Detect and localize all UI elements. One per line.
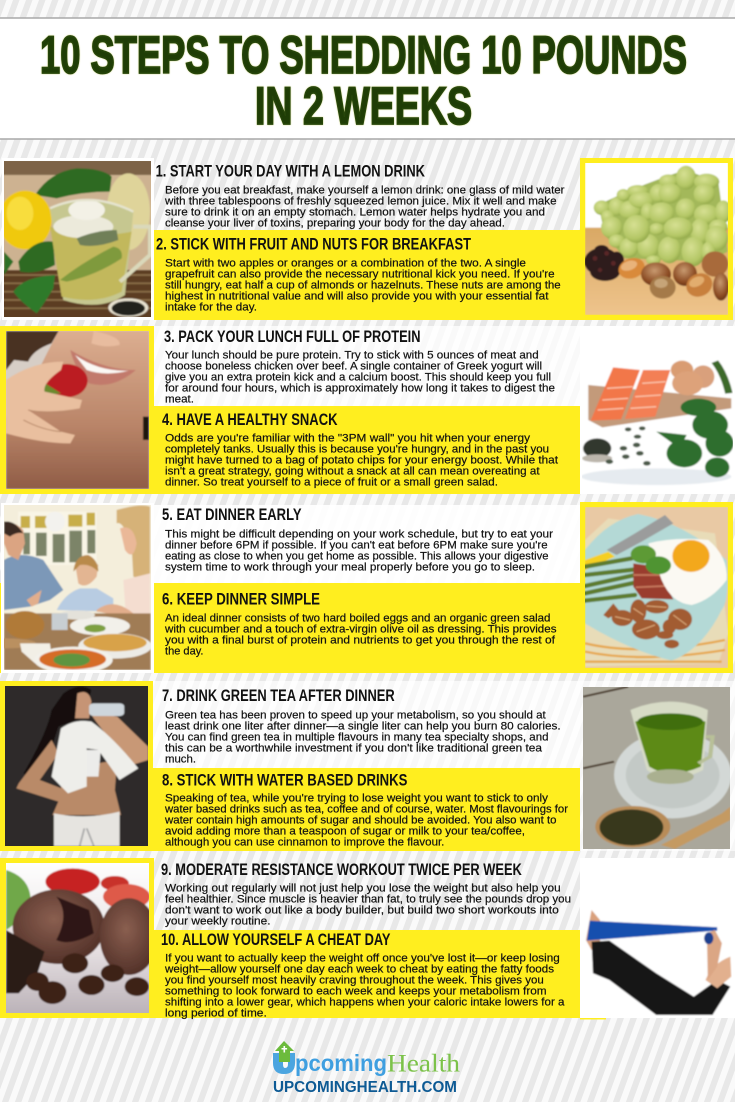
logo: Upcoming Health — [273, 1041, 461, 1096]
heading: step 2: 2. STICK WITH FRUIT AND NUTS FOR BREAKFAST — [156, 234, 471, 254]
title — [40, 26, 687, 136]
text: step 4 — [165, 432, 558, 488]
photo: family dinner — [4, 505, 151, 670]
text: step 9: Working out regularly will not just help you lose the weight but also help you — [165, 882, 561, 894]
text: step 5: system time to work through your meal properly before you go to sleep. — [165, 562, 535, 574]
heading: step 5: 5. EAT DINNER EARLY — [162, 505, 302, 524]
logo: Upcoming Health: Health — [387, 1050, 461, 1078]
text: step 9: don't want to work out like a body builder, but build two short workouts into — [165, 904, 559, 916]
text: step 8 — [164, 792, 568, 848]
text: step 1: Before you eat breakfast, make yourself a lemon drink: one glass of mild water — [165, 184, 565, 196]
text: step 5 — [165, 528, 553, 574]
text: step 3: choose boneless chicken over beef. A single container of Greek yogurt will — [165, 360, 542, 372]
heading: step 1: 1. START YOUR DAY WITH A LEMON DRINK — [156, 162, 426, 180]
photo: woman drinking water — [5, 686, 148, 846]
text: step 6: with cucumber and a touch of extra-virgin olive oil as dressing. This provides — [164, 624, 557, 636]
text: step 4: isn't a great strategy, going without a snack at all can mean overeating at — [165, 466, 540, 478]
text: step 5: This might be difficult depending on your work schedule, but try to eat your — [165, 528, 553, 540]
photo: grapes and nuts — [584, 162, 731, 315]
text: step 4: Odds are you're familiar with the "3PM wall" you hit when your energy — [165, 432, 531, 444]
text: step 2: grapefruit can also provide the necessary nutritional kick you need. If you're — [165, 268, 555, 280]
logo: Upcoming Health: UPCOMINGHEALTH.COM — [273, 1079, 457, 1096]
heading: step 9: 9. MODERATE RESISTANCE WORKOUT TWICE PER WEEK — [161, 860, 522, 879]
text: step 7 — [165, 710, 561, 766]
text: step 9: your weekly routine. — [165, 916, 270, 928]
text: step 8: water based drinks such as tea, coffee and of course, water. Most flavourings for — [164, 804, 568, 816]
text: step 7: least drink one liter after dinner—a single liter can help you burn 80 calories. — [165, 720, 561, 732]
text: step 10: something to look forward to each week and keeps your metabolism from — [165, 986, 547, 998]
text: step 2: highest in nutritional value and will also provide you with your essential fat — [165, 290, 548, 302]
title banner — [0, 18, 735, 139]
panel: steps 3 and 4 — [0, 326, 735, 494]
text: step 1: with three tablespoons of freshly squeezed lemon juice. Mix it well and make — [164, 196, 556, 208]
text: step 3 — [165, 350, 555, 406]
photo: lemon drink — [4, 161, 151, 317]
heading: step 3: 3. PACK YOUR LUNCH FULL OF PROTEIN — [164, 327, 420, 346]
photo: resistance band stretch — [585, 910, 732, 1016]
text: step 8: avoid adding more than a teaspoon of sugar or milk to your tea/coffee, — [165, 826, 525, 838]
text: step 10: If you want to actually keep the weight off once you've lost it—or keep losing — [165, 952, 560, 964]
photo: egg asparagus and pecans — [585, 507, 728, 668]
photo: green tea cup — [581, 685, 735, 852]
text: step 1: sure to drink it on an empty stomach. Lemon water helps hydrate you and — [165, 206, 545, 218]
text: step 4: completely tanks. Usually this is because you're hungry, and in the past you — [165, 444, 549, 456]
text: step 3: give you an extra protein kick and a calcium boost. This should keep you full — [165, 372, 551, 384]
text: step 7: Green tea has been proven to speed up your metabolism, so you should at — [165, 710, 546, 722]
text: step 7: You can find green tea in multiple flavours in many tea specialty shops, and — [165, 732, 548, 744]
text: step 1 — [164, 184, 565, 230]
panel: steps 1 and 2 — [0, 155, 733, 325]
text: step 9: feel healthier. Since muscle is heavier than fat, to truly see the pounds drop you — [165, 894, 571, 906]
heading: step 8: 8. STICK WITH WATER BASED DRINKS — [162, 770, 407, 790]
text: step 8: although you can use cinnamon to improve the flavour. — [165, 836, 444, 848]
text: step 3: for around four hours, which is approximately how long it takes to digest the — [165, 382, 555, 394]
photo: salmon eggs and spinach — [582, 360, 733, 486]
title: IN 2 WEEKS — [255, 77, 472, 136]
text: step 10: long period of time. — [165, 1008, 267, 1020]
text: step 10: shifting into a lower gear, which happens when your caloric intake lowers for a — [165, 996, 565, 1008]
text: step 4: dinner. So treat yourself to a piece of fruit or a small green salad. — [165, 476, 498, 488]
text: step 6: you with a final burst of protein and nutrients to get you through the rest of — [165, 634, 556, 646]
text: step 2: Start with two apples or oranges or a combination of the two. A single — [165, 258, 526, 270]
text: step 3: Your lunch should be pure protein. Try to stick with 5 ounces of meat and — [165, 350, 539, 362]
heading: step 6: 6. KEEP DINNER SIMPLE — [162, 590, 320, 608]
text: step 6: the day. — [165, 646, 204, 658]
text: step 9 — [165, 882, 571, 928]
heading: step 4: 4. HAVE A HEALTHY SNACK — [162, 410, 338, 429]
panel: steps 5 and 6 — [0, 502, 733, 677]
text: step 1: cleanse your liver of toxins, preparing your body for the day ahead. — [165, 218, 505, 230]
text: step 2 — [165, 258, 561, 314]
text: step 5: eating as close to when you get home as possible. This allows your digestive — [165, 550, 548, 562]
text: step 5: dinner before 6PM if possible. If you can't eat before 6PM make sure you're — [165, 540, 548, 552]
text: step 6: An ideal dinner consists of two hard boiled eggs and an organic green salad — [165, 612, 550, 624]
icon: U with green arrow — [273, 1041, 295, 1074]
text: step 4: might have turned to a bag of potato chips for your energy boost. While that — [165, 454, 558, 466]
text: step 10: you find yourself most heavily craving throughout the week. This gives you — [165, 974, 544, 986]
text: step 7: much. — [165, 754, 196, 766]
photo: woman eating strawberry — [0, 330, 155, 490]
text: step 8: water contain high amounts of sugar and should be avoided. You also want to — [164, 814, 556, 826]
text: step 2: intake for the day. — [165, 302, 257, 314]
photo: chocolate ice cream — [6, 863, 149, 1013]
heading: step 7: 7. DRINK GREEN TEA AFTER DINNER — [162, 686, 395, 705]
text: step 6 — [164, 612, 557, 658]
text: step 7: this can be a worthwhile investment if you don't like traditional green tea — [165, 742, 543, 754]
text: step 2: still hungry, eat half a cup of almonds or hazelnuts. These nuts are among the — [165, 280, 561, 292]
text: step 8: Speaking of tea, while you're trying to lose weight you want to stick to only — [165, 792, 549, 804]
text: step 3: meat. — [165, 394, 194, 406]
logo: Upcoming Health: pcoming — [295, 1050, 387, 1076]
text: step 10 — [164, 952, 565, 1020]
panel: steps 7 and 8 — [0, 681, 735, 852]
text: step 10: weight—allow yourself one day each week to cheat by eating the fatty foods — [164, 964, 555, 976]
panel: steps 9 and 10 — [0, 858, 735, 1020]
heading: step 10: 10. ALLOW YOURSELF A CHEAT DAY — [161, 930, 391, 949]
